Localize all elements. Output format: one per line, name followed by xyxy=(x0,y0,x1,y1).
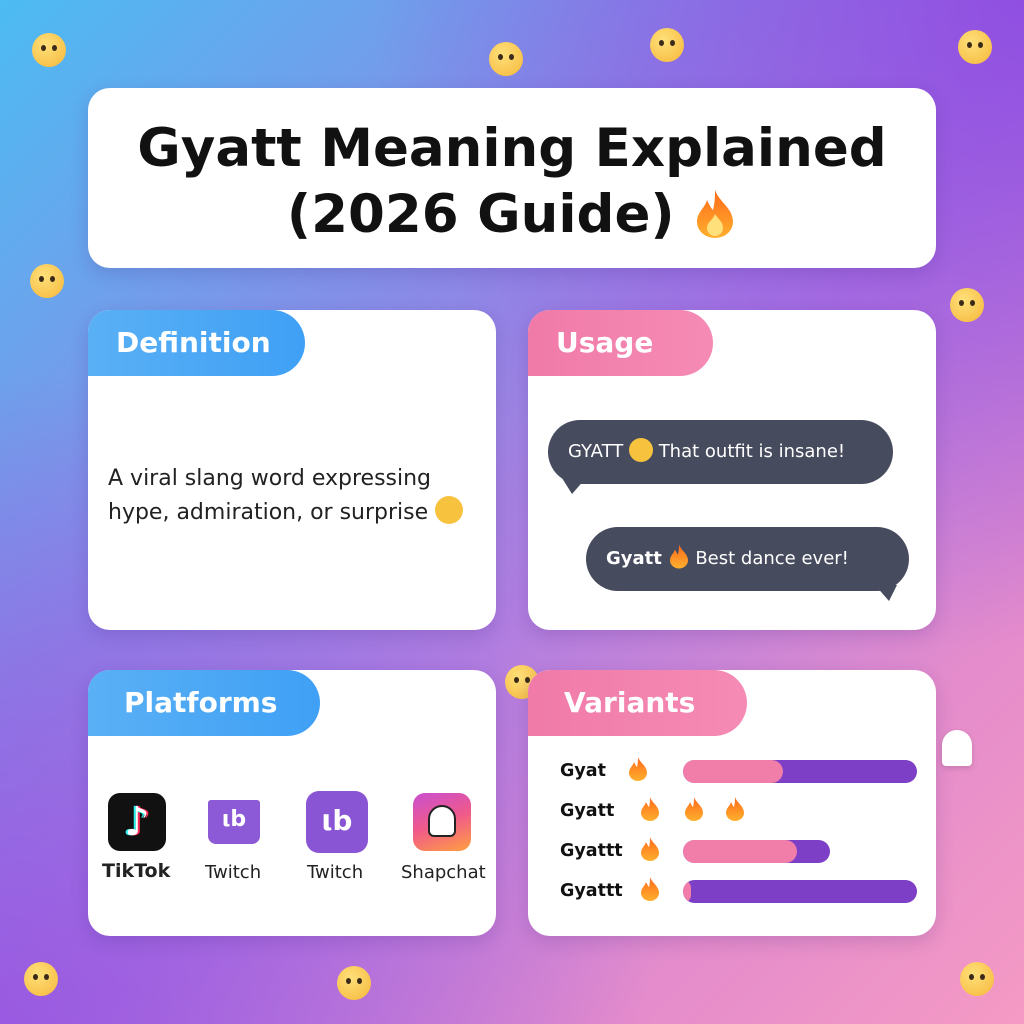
panel: definition xyxy=(88,310,496,630)
heading: definition xyxy=(88,310,305,376)
heading: variants: Variants xyxy=(564,686,695,719)
heading: definition: Definition xyxy=(116,326,271,359)
text: Gyat xyxy=(560,761,606,781)
heading: variants xyxy=(528,670,747,736)
icon: twitch outline: ιb xyxy=(222,807,246,832)
chat bubble 1 xyxy=(548,420,893,484)
title: (2026 Guide) xyxy=(287,184,675,245)
title xyxy=(137,118,887,245)
text: Gyattt xyxy=(560,881,623,901)
panel: variants xyxy=(528,670,936,936)
text: Gyattt xyxy=(560,841,623,861)
chat bubble 2 xyxy=(586,527,909,591)
icon: tiktok xyxy=(108,793,166,851)
label twitch 2: Twitch xyxy=(307,862,363,883)
label twitch: Twitch xyxy=(205,862,261,883)
icon: snapchat xyxy=(413,793,471,851)
icon: twitch filled: ιb xyxy=(322,804,352,837)
title card xyxy=(88,88,936,268)
icon: twitch filled xyxy=(306,791,368,853)
chat bubble 2: Gyatt Best dance ever! xyxy=(606,548,849,569)
label snapchat: Shapchat xyxy=(401,862,486,883)
variants chart xyxy=(560,757,917,903)
icon: twitch outline xyxy=(208,800,260,844)
panel: platforms xyxy=(88,670,496,936)
label tiktok: TikTok xyxy=(102,860,170,882)
heading: usage xyxy=(528,310,713,376)
definition text xyxy=(108,466,463,525)
icon: ghost xyxy=(942,730,972,766)
heading: platforms: Platforms xyxy=(124,686,277,719)
definition text: A viral slang word expressing xyxy=(108,466,431,491)
chat bubble 1: GYATT That outfit is insane! xyxy=(568,441,845,462)
title: Gyatt Meaning Explained xyxy=(137,118,887,179)
heading: usage: Usage xyxy=(556,326,653,359)
panel: usage xyxy=(528,310,936,630)
text: Gyatt xyxy=(560,801,614,821)
icon: tiktok: ♪ xyxy=(124,799,150,845)
definition text: hype, admiration, or surprise xyxy=(108,500,428,525)
heading: platforms xyxy=(88,670,320,736)
